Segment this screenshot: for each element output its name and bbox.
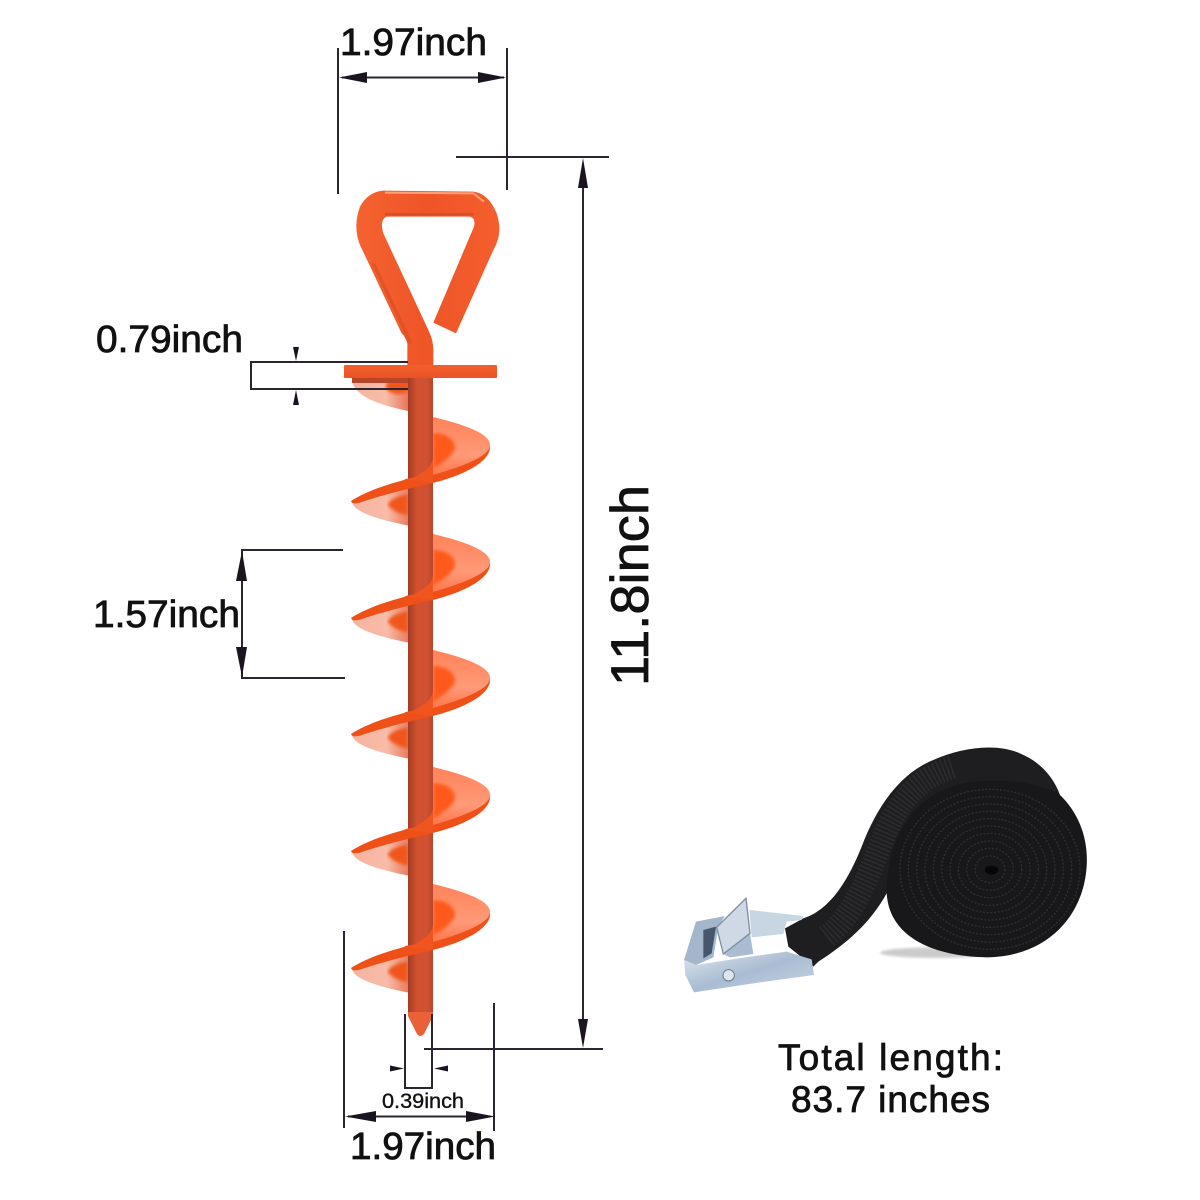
buckle teeth	[703, 927, 716, 958]
front blade bands	[351, 445, 490, 970]
dimension: blade width	[344, 931, 496, 1168]
cam buckle strap	[684, 748, 1087, 992]
label: overall length: 11.8inch	[601, 485, 660, 686]
rivet	[723, 970, 734, 981]
dimension: plate thickness	[96, 319, 408, 405]
top disc plate	[344, 365, 497, 378]
dimension: shaft diameter	[382, 1014, 464, 1113]
roll face	[887, 781, 1087, 957]
dimension: top width	[338, 22, 507, 194]
strap length caption	[778, 1037, 1003, 1120]
buckle base	[684, 952, 814, 992]
ground anchor auger	[344, 191, 499, 1036]
label: blade pitch: 1.57inch	[93, 594, 240, 636]
strap weave highlight	[827, 767, 953, 937]
label: top width: 1.97inch	[340, 22, 487, 64]
buckle lever rail	[723, 933, 753, 957]
strap tail and top wrap	[785, 748, 1060, 967]
pointed tip	[408, 1012, 433, 1036]
triangular handle	[356, 191, 499, 367]
buckle lever	[717, 898, 750, 954]
label: shaft diameter: 0.39inch	[382, 1090, 464, 1113]
buckle back arm	[749, 910, 803, 937]
dimension: blade pitch	[93, 550, 345, 678]
buckle left end	[684, 916, 725, 965]
strap length caption: 83.7 inches	[791, 1079, 990, 1120]
ground shadow	[880, 947, 993, 958]
shaft	[408, 370, 433, 1015]
strap length caption: Total length:	[778, 1037, 1003, 1078]
label: plate thickness: 0.79inch	[96, 319, 243, 361]
auger flights	[352, 378, 490, 993]
dimension: overall length	[424, 157, 660, 1049]
metal buckle	[684, 898, 814, 992]
label: blade width: 1.97inch	[350, 1126, 496, 1168]
